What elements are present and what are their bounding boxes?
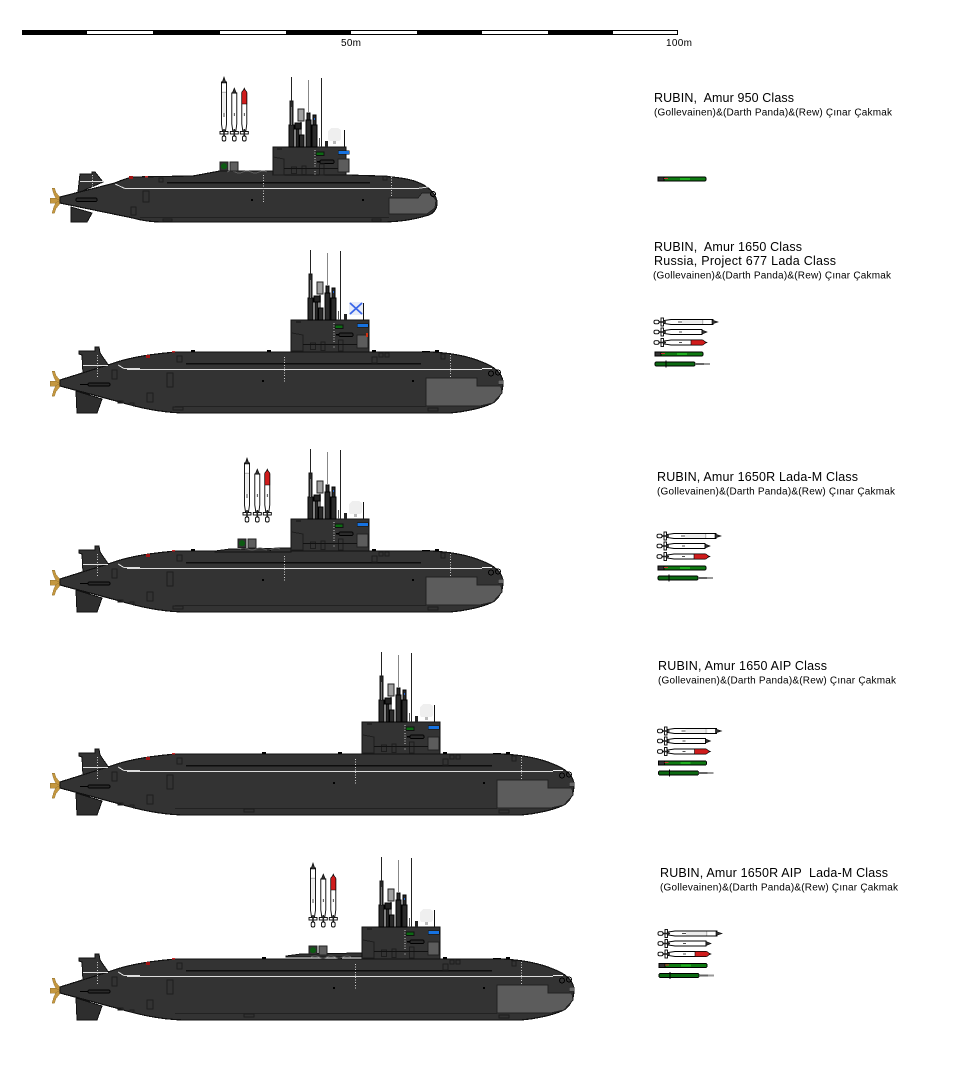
icon: propeller: [50, 188, 60, 213]
hull: [60, 352, 503, 413]
label: Amur 1650R Lada-M: (Gollevainen)&(Darth Panda)&(Rew) Çınar Çakmak: [657, 486, 896, 498]
deck hump: [215, 548, 291, 552]
hull: [60, 754, 574, 815]
missiles: [309, 863, 337, 927]
label: Amur 1650R AIP Lada-M: [660, 866, 899, 894]
label: Amur 1650R AIP Lada-M: RUBIN, Amur 1650R AIP Lada-M Class: [660, 866, 888, 880]
label: Amur 1650 AIP: [658, 659, 897, 686]
label: Amur 1650: (Gollevainen)&(Darth Panda)&(Rew) Çınar Çakmak: [653, 270, 892, 282]
hull: [60, 171, 437, 222]
label: Amur 950: RUBIN, Amur 950 Class: [654, 91, 794, 105]
missile hatches: [220, 162, 238, 171]
missile hatches: [309, 946, 327, 955]
scale bar: 50m: [341, 38, 361, 49]
label: Amur 1650 AIP: RUBIN, Amur 1650 AIP Class: [658, 659, 827, 673]
hull: [60, 551, 503, 612]
icon: propeller: [50, 773, 60, 798]
label: Amur 950: (Gollevainen)&(Darth Panda)&(Rew) Çınar Çakmak: [654, 108, 893, 118]
submarine: Amur 1650: [50, 250, 503, 413]
label: Amur 1650 AIP: (Gollevainen)&(Darth Panda)&(Rew) Çınar Çakmak: [658, 676, 897, 686]
label: Amur 950: [654, 91, 893, 118]
weapons set: [657, 532, 721, 582]
hull details: [76, 171, 436, 221]
rudder and lower fin: [76, 347, 109, 413]
weapons set: [654, 318, 718, 368]
label: Amur 1650: Russia, Project 677 Lada Class: [654, 254, 836, 268]
label: Amur 1650R Lada-M: RUBIN, Amur 1650R Lada-M Class: [657, 470, 858, 484]
label: Amur 1650: RUBIN, Amur 1650 Class: [654, 240, 802, 254]
sail with masts: [362, 857, 440, 959]
rudder and lower fin: [76, 954, 109, 1020]
submarine: Amur 1650 AIP: [50, 652, 574, 815]
weapons set: [658, 930, 722, 979]
label: Amur 1650: [653, 240, 892, 282]
scale bar: 100m: [666, 38, 692, 49]
label: Amur 1650R Lada-M: [657, 470, 896, 498]
sail with masts: [273, 77, 349, 176]
rudder and lower fin: [71, 172, 103, 222]
sail with masts: [291, 449, 369, 551]
sail with masts: [362, 652, 440, 754]
submarine: Amur 1650R Lada-M: [50, 449, 503, 612]
hull details: [80, 350, 503, 411]
missile hatches: [238, 539, 256, 548]
hull: [60, 959, 574, 1020]
rudder and lower fin: [76, 749, 109, 815]
sail with masts and flag: [291, 250, 369, 352]
missiles: [243, 458, 271, 522]
icon: propeller: [50, 978, 60, 1003]
weapons set: [658, 727, 722, 776]
hull details: [80, 752, 574, 813]
scale bar: [22, 30, 692, 49]
submarine: Amur 950: [50, 77, 437, 222]
label: Amur 1650R AIP Lada-M: (Gollevainen)&(Darth Panda)&(Rew) Çınar Çakmak: [660, 882, 899, 894]
missiles: [220, 77, 248, 141]
rudder and lower fin: [76, 546, 109, 612]
hull details: [80, 956, 574, 1018]
submarine: Amur 1650R AIP Lada-M: [50, 857, 574, 1020]
deck hump: [286, 953, 362, 957]
icon: propeller: [50, 570, 60, 595]
weapon: torpedo: [658, 177, 706, 181]
icon: propeller: [50, 371, 60, 396]
hull details: [80, 548, 503, 610]
